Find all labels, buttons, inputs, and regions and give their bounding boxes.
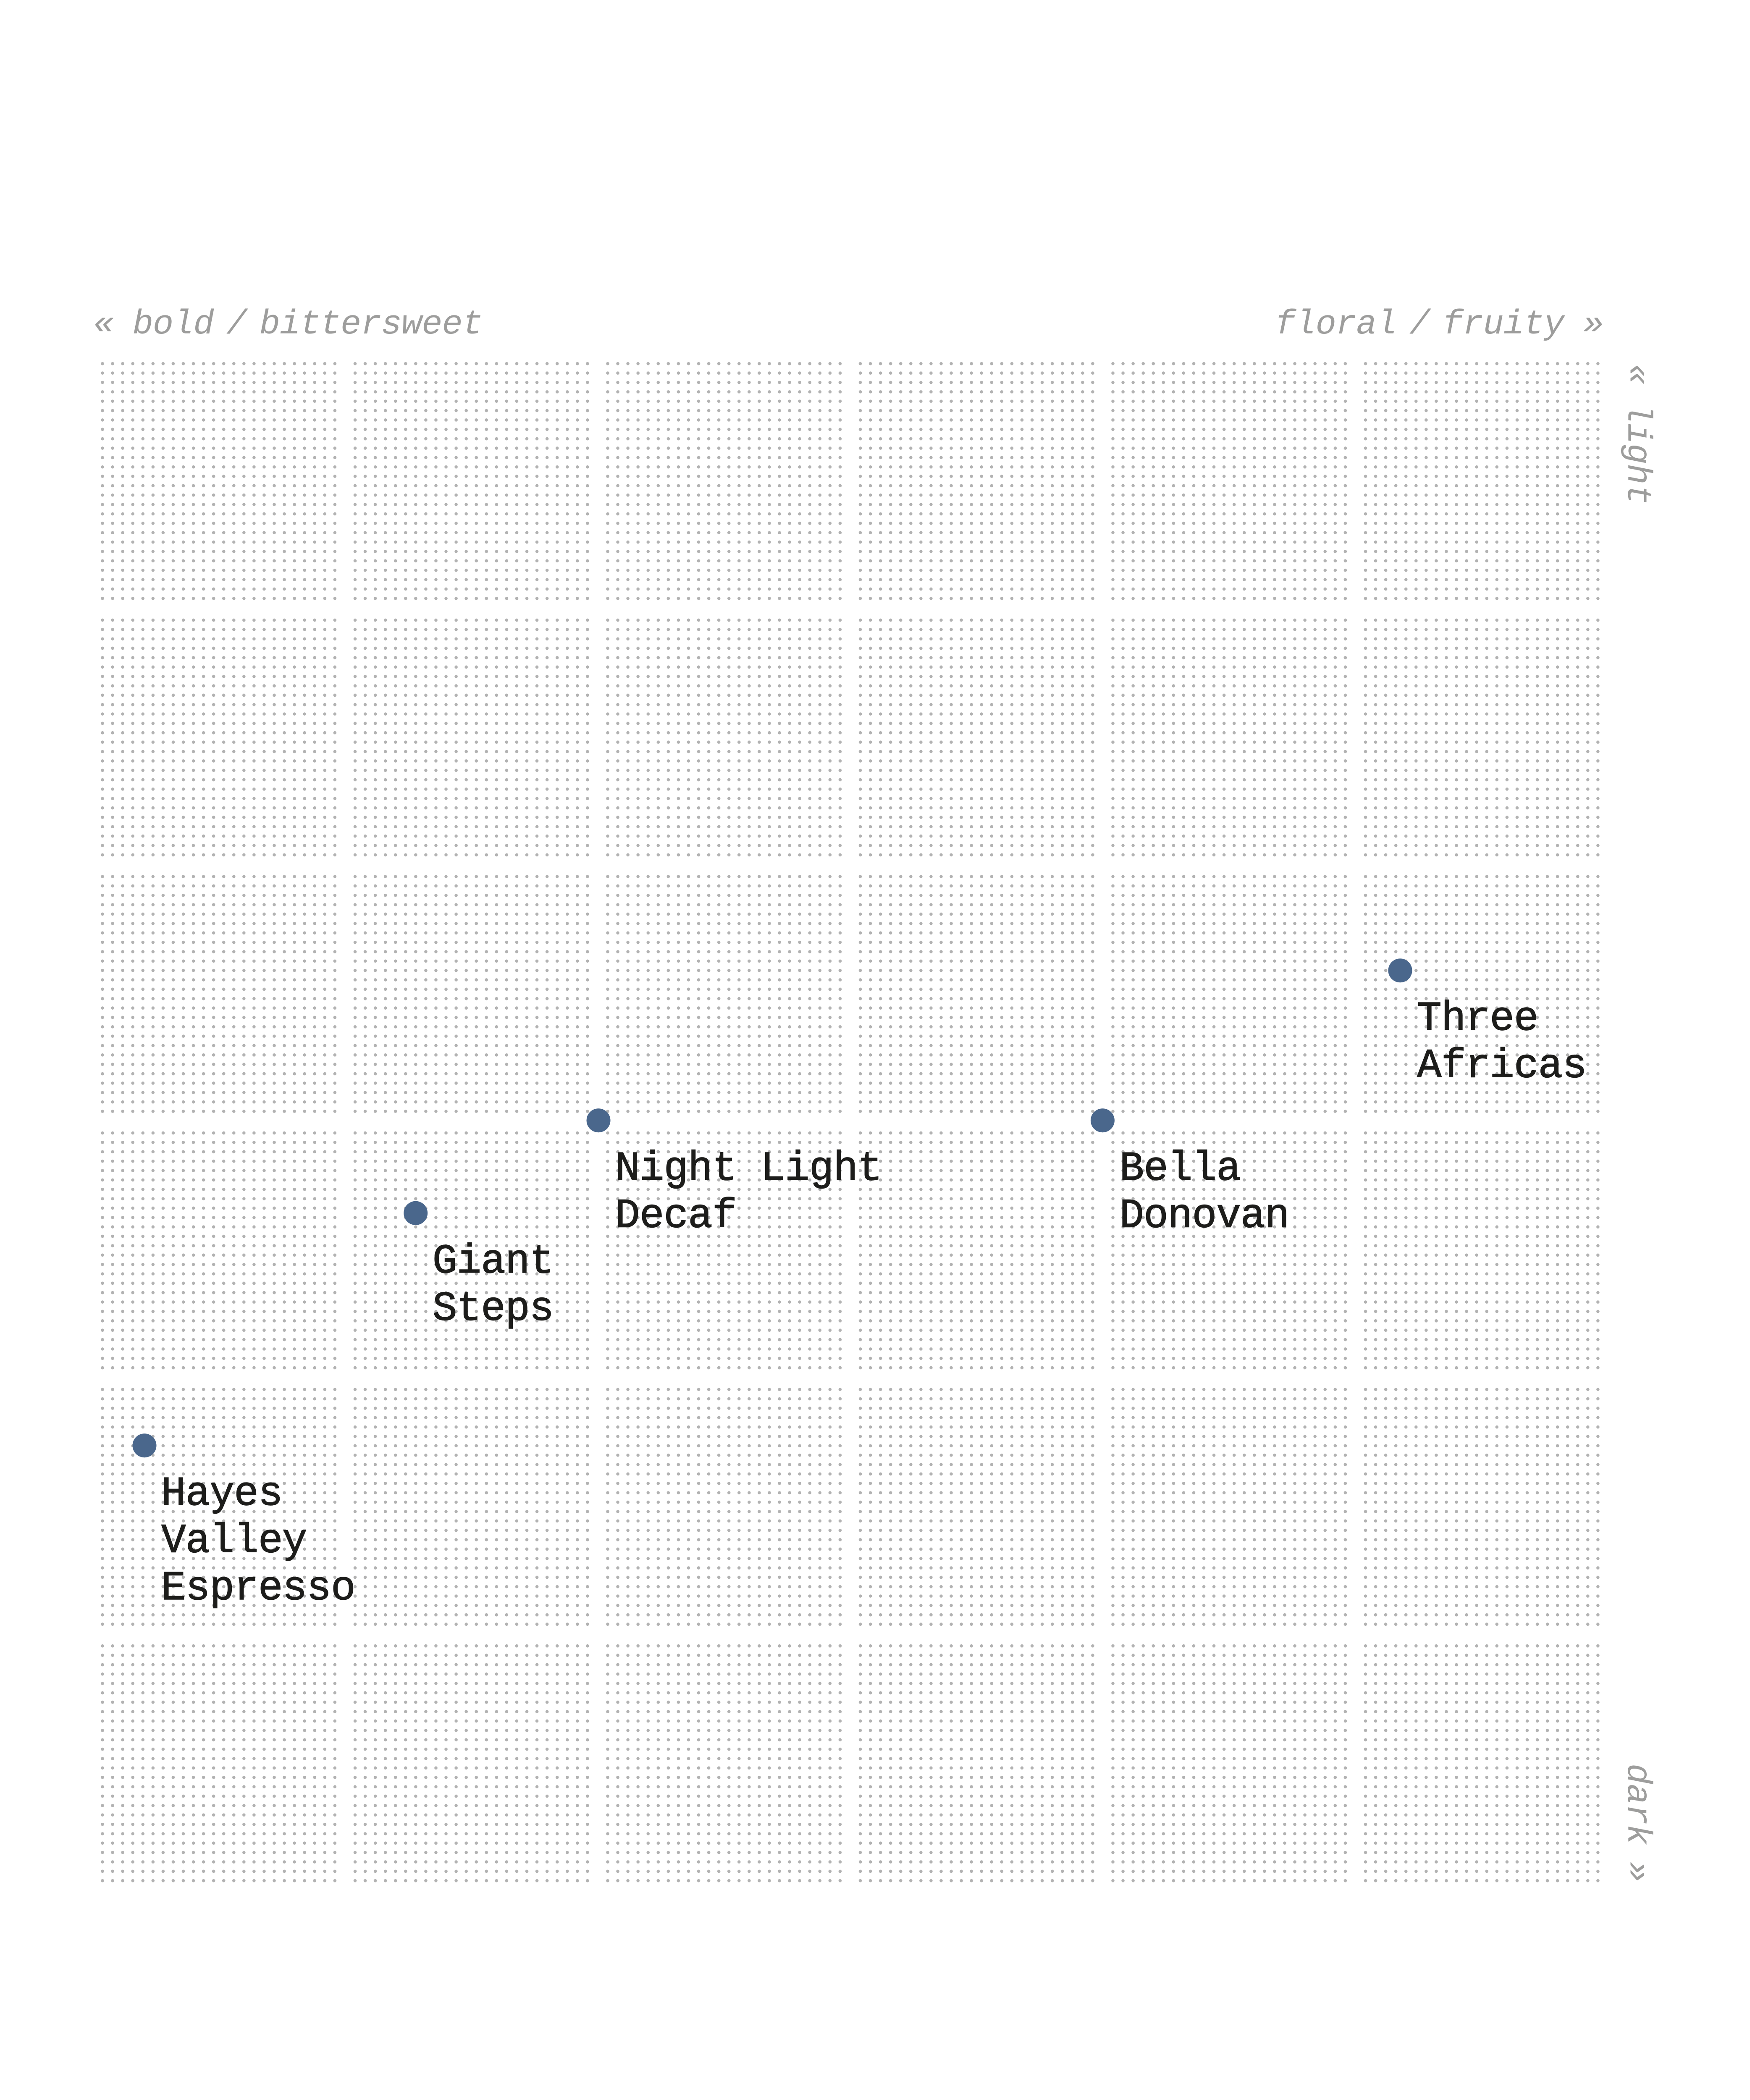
- data point: Bella Donovan: Donovan: [1119, 1193, 1289, 1240]
- y axis label: dark: dark »: [1618, 1764, 1657, 1882]
- data point: Giant Steps: Steps: [433, 1286, 554, 1332]
- data point: Hayes Valley Espresso: [133, 1433, 355, 1612]
- data point: Three Africas: Three: [1417, 996, 1538, 1042]
- data point: Giant Steps: [404, 1201, 554, 1332]
- dot grid plot area: [102, 364, 1598, 1881]
- data point: Night Light Decaf: Night Light: [615, 1146, 882, 1192]
- x axis label: floral / fruity: floral / fruity »: [1275, 305, 1603, 344]
- data point: Hayes Valley Espresso: Hayes: [161, 1471, 283, 1517]
- data point: Hayes Valley Espresso: Valley: [161, 1518, 307, 1565]
- data point: Bella Donovan: [1091, 1108, 1289, 1240]
- data point: Night Light Decaf: Decaf: [615, 1193, 737, 1240]
- data point: Night Light Decaf: [586, 1108, 882, 1240]
- data point: Three Africas: Africas: [1417, 1043, 1587, 1090]
- data point: Giant Steps: Giant: [433, 1239, 554, 1285]
- data point: Hayes Valley Espresso: Espresso: [161, 1565, 355, 1612]
- data point: Bella Donovan: Bella: [1119, 1146, 1241, 1192]
- data point: Three Africas: [1388, 958, 1587, 1090]
- y axis label: light: « light: [1618, 364, 1657, 504]
- x axis label: bold / bittersweet: « bold / bittersweet: [93, 305, 483, 344]
